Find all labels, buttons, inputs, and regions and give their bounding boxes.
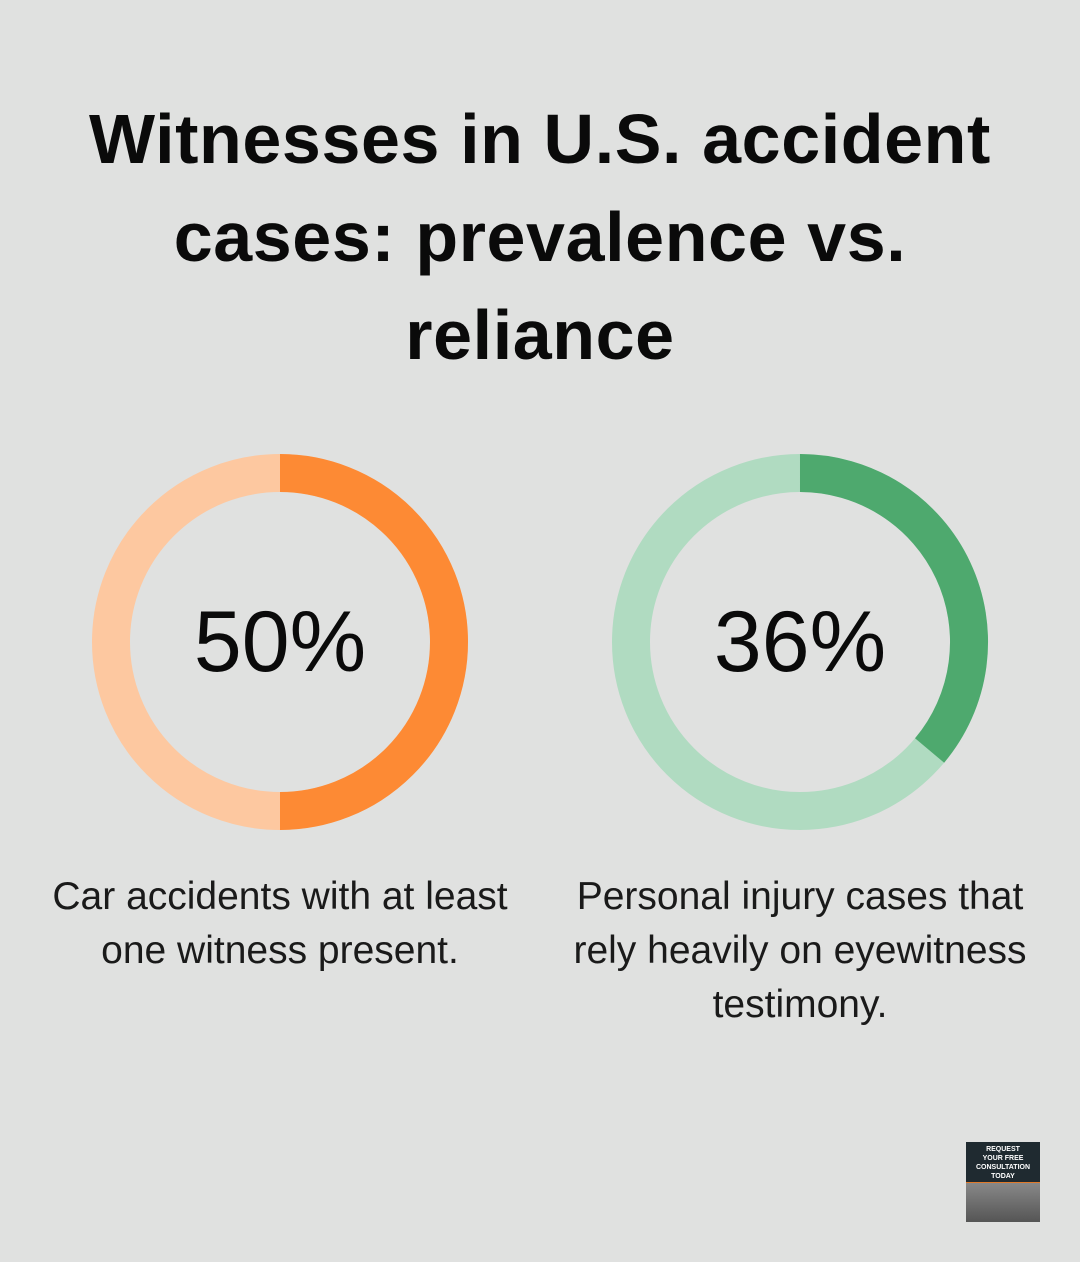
- logo: consultation badge: [966, 1142, 1040, 1222]
- logo: consultation badge: TODAY: [991, 1173, 1015, 1180]
- logo: consultation badge: CONSULTATION: [976, 1164, 1030, 1171]
- label right: Personal injury cases that: [577, 875, 1023, 918]
- logo: consultation badge: REQUEST: [986, 1146, 1020, 1153]
- title: reliance: [405, 296, 675, 374]
- donut: 50%: [92, 454, 468, 830]
- title: [89, 100, 991, 374]
- label left: one witness present.: [101, 929, 459, 972]
- logo: consultation badge: YOUR FREE: [983, 1155, 1023, 1162]
- label right: testimony.: [713, 983, 887, 1026]
- title: cases: prevalence vs.: [174, 198, 906, 276]
- donut: 36%: 36%: [714, 594, 886, 690]
- label right: [573, 875, 1027, 1026]
- title: Witnesses in U.S. accident: [89, 100, 991, 178]
- donut: 50%: 50%: [194, 594, 366, 690]
- label left: [52, 875, 508, 972]
- label left: Car accidents with at least: [52, 875, 508, 918]
- label right: rely heavily on eyewitness: [573, 929, 1027, 972]
- donut: 36%: [612, 454, 988, 830]
